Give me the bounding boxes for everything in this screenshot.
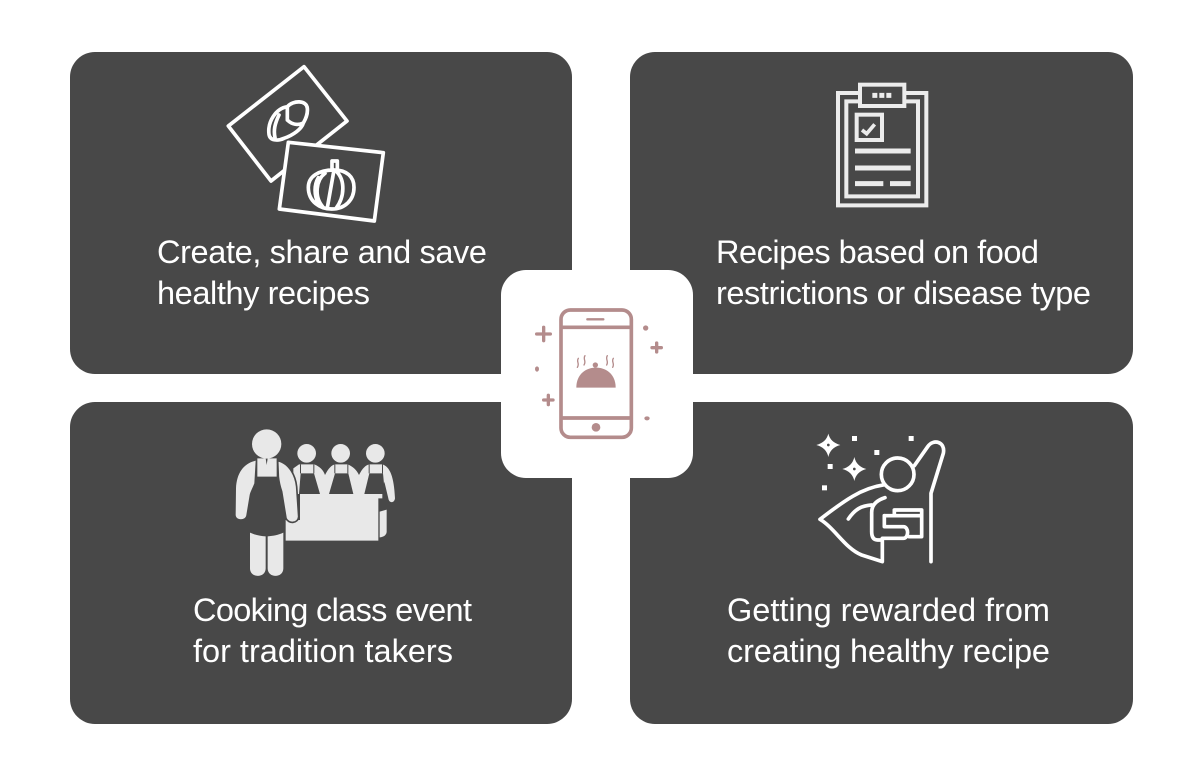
icon: clipboard checklist <box>838 85 926 205</box>
heading: creating healthy recipe: creating healthy recipe <box>727 633 1050 669</box>
heading: for tradition takers: for tradition takers <box>193 633 453 669</box>
heading: healthy recipes: healthy recipes <box>157 275 370 311</box>
panel: getting rewarded <box>630 402 1133 724</box>
heading: getting rewarded from: Getting rewarded from <box>727 592 1050 628</box>
panel: create, share and save <box>70 52 572 374</box>
icon: chef and students <box>236 429 395 576</box>
heading: cooking class event: Cooking class event <box>193 592 472 628</box>
heading: recipes based on food: Recipes based on food <box>716 234 1039 270</box>
heading: create, share and save: Create, share and save <box>157 234 487 270</box>
icon: recipe cards <box>228 67 383 221</box>
panel: cooking class event <box>70 402 572 724</box>
icon: phone with food cloche <box>535 310 661 437</box>
panel: recipes based on restrictions <box>630 52 1133 374</box>
icon: caped hero with reward <box>816 434 944 562</box>
heading: restrictions or disease type: restrictions or disease type <box>716 275 1091 311</box>
panel: central phone badge <box>501 270 693 478</box>
